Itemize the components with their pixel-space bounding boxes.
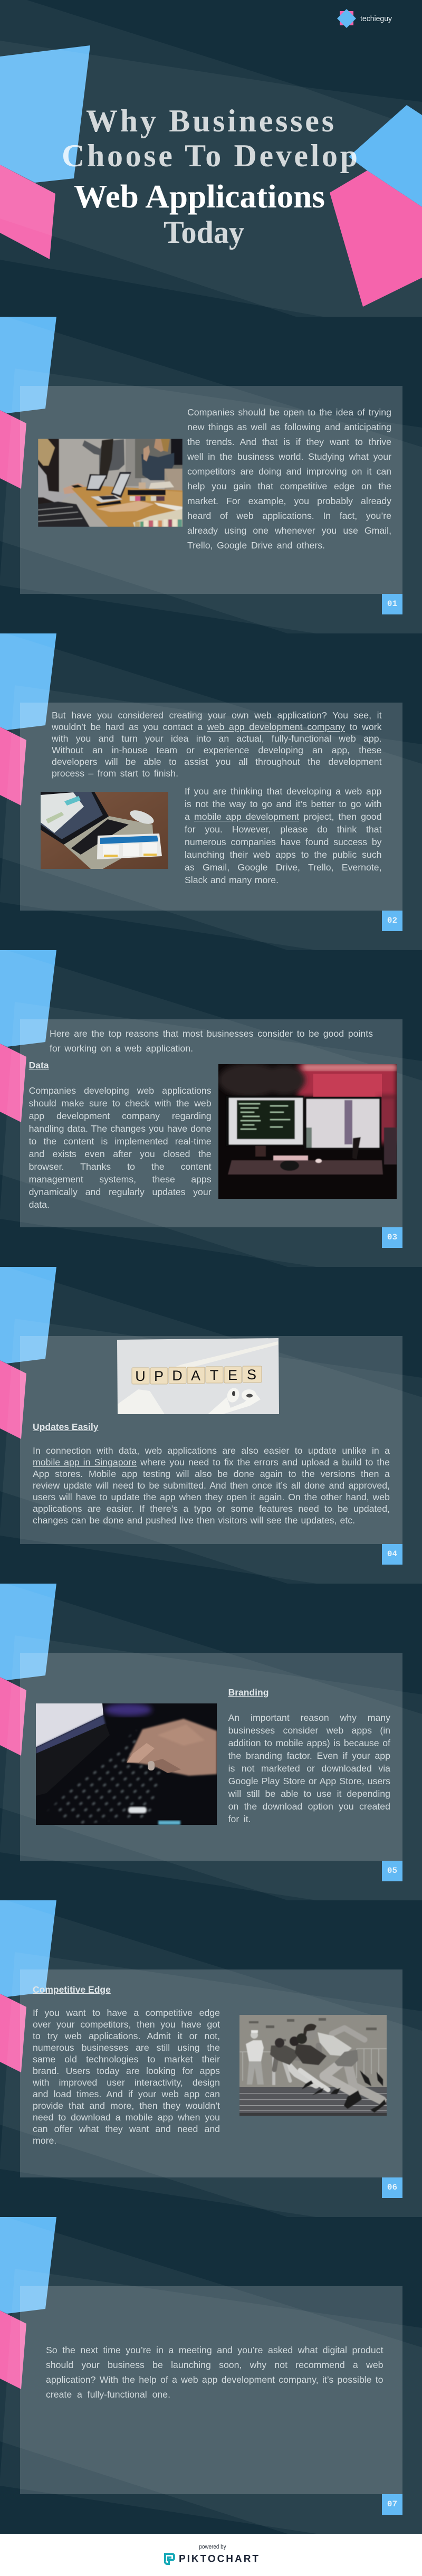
text: branding paragraph <box>228 1712 390 1824</box>
badge 03 <box>382 1227 402 1248</box>
letter tiles: U <box>135 1368 146 1384</box>
text: intro paragraph <box>187 407 391 551</box>
section 4 background <box>0 1267 422 1584</box>
icon: Piktochart logo <box>165 2554 174 2564</box>
text: branding paragraph: An important reason why many <box>228 1712 390 1723</box>
background: hero section <box>0 0 422 317</box>
photo: sprinters leaving the blocks <box>239 2015 387 2116</box>
text: own web application: process – from start to finish. <box>52 768 178 779</box>
text: data paragraph: browser. Thanks to the content <box>29 1161 212 1172</box>
photo: dual monitors on a desk <box>218 1064 397 1199</box>
hero left blue shape <box>0 45 90 183</box>
text: mobile app comparison: Slack and many more. <box>185 875 279 885</box>
text: updates paragraph: review update will need to be submitted. And then once it’s all done and approved, <box>33 1480 390 1491</box>
text: data paragraph <box>28 1085 212 1210</box>
text: intro paragraph: Trello, Google Drive and others. <box>187 540 325 551</box>
text: top reasons intro <box>50 1028 373 1054</box>
text: data paragraph: dynamically and regularly updates your <box>29 1187 212 1197</box>
hero right blue shape <box>349 105 422 207</box>
logo: techieguy: techieguy <box>360 14 392 23</box>
title: Why Businesses <box>86 103 334 138</box>
text: updates paragraph: users will have to update the app when they open it again. On the other hand, web <box>33 1492 390 1502</box>
panel 3 <box>20 1019 402 1227</box>
title: Choose To Develop <box>62 138 358 173</box>
text: mobile app comparison: launching their web apps to the public such <box>185 849 382 860</box>
text: conclusion: So the next time you’re in a meeting and you’re asked what digital product <box>46 2345 383 2355</box>
text: branding paragraph: is not marketed or downloaded via <box>228 1763 390 1774</box>
letter tiles: E <box>228 1367 237 1383</box>
badge 03: 03 <box>387 1233 397 1242</box>
text: competitive edge paragraph: over your competitors, then you have got <box>33 2019 220 2030</box>
text: branding paragraph: for it. <box>228 1814 251 1824</box>
badge 05: 05 <box>387 1866 397 1876</box>
text: competitive edge paragraph: brand. Users today are looking for apps <box>33 2066 220 2076</box>
panel 7 <box>20 2286 402 2494</box>
photo: UPDATES letter tiles <box>117 1338 279 1414</box>
text: competitive edge paragraph: numerous businesses are still using the <box>33 2042 220 2053</box>
text: conclusion: should your business be launching soon, why not recommend a web <box>46 2360 383 2370</box>
photo: hand typing on a laptop keyboard <box>36 1703 217 1825</box>
text: own web application: with you and turn your idea into an actual, fully-functional web app. <box>52 733 382 744</box>
text: branding paragraph: businesses consider web apps (in <box>228 1725 390 1736</box>
text: intro paragraph: help you gain that competitive edge on the <box>187 481 391 491</box>
heading: Branding: Branding <box>228 1687 268 1698</box>
badge 02: 02 <box>387 916 397 925</box>
section 5 background <box>0 1584 422 1900</box>
photo: team meeting around a table <box>38 439 183 527</box>
letter tiles: D <box>172 1368 183 1384</box>
text: intro paragraph: well in the business world. Studying what your <box>187 451 391 462</box>
photo: laptop and tablet on wood table <box>41 792 168 869</box>
text: data paragraph: handling data. The changes you have done <box>29 1123 212 1134</box>
text: mobile app comparison: numerous companies have found success by <box>185 837 382 847</box>
letter tiles: P <box>154 1368 164 1384</box>
text: updates paragraph: changes can be done and pushed live then visitors will see the updates, etc. <box>33 1515 355 1526</box>
text: mobile app comparison: as Gmail, Google Drive, Trello, Evernote, <box>185 862 382 873</box>
text: own web application: Without an in-house team or experience developing an app, these <box>52 745 382 755</box>
text: intro paragraph: heard of web applications. In fact, you’re <box>187 510 391 521</box>
text: mobile app comparison: for you. However, please do think that <box>185 824 382 835</box>
text: intro paragraph: the trends. And that is if they want to thrive <box>187 437 391 447</box>
text: competitive edge paragraph: can offer what they want and need and <box>33 2124 220 2134</box>
text: data paragraph: to the content is implemented real-time <box>29 1136 212 1147</box>
badge 04 <box>382 1544 402 1565</box>
text: top reasons intro: for working on a web application. <box>50 1043 193 1054</box>
text: competitive edge paragraph: provide that and more, then they wouldn’t <box>33 2100 220 2111</box>
badge 07: 07 <box>387 2499 397 2509</box>
text: updates paragraph: App stores. Mobile app testing will also be done again to the versions then a <box>33 1469 390 1479</box>
text: competitive edge paragraph: with improved user interactivity, design <box>33 2077 220 2088</box>
footer: powered by Piktochart: powered by <box>199 2544 226 2550</box>
text: updates paragraph <box>33 1445 390 1526</box>
spectator <box>246 2030 264 2085</box>
text: updates paragraph: In connection with data, web applications are also easier to update unlike in a <box>33 1445 390 1456</box>
text: competitive edge paragraph: same old technologies to market their <box>33 2054 220 2064</box>
text: competitive edge paragraph: to try web applications. Admit it or not, <box>33 2031 220 2041</box>
letter tiles <box>132 1366 262 1384</box>
panel 6 <box>20 1969 402 2177</box>
text: top reasons intro: Here are the top reasons that most businesses consider to be good points <box>50 1028 373 1039</box>
logo: techieguy <box>337 9 392 28</box>
letter tiles: S <box>247 1367 256 1382</box>
text: conclusion: application? With the help of a web app development company, it’s possible to <box>46 2374 383 2385</box>
text: conclusion <box>46 2345 383 2400</box>
text: mobile app comparison <box>185 786 382 885</box>
section 7 background <box>0 2217 422 2534</box>
text: updates paragraph: applications are easier. If there’s a typo or some features need to be updated, <box>33 1503 390 1514</box>
panel 1 <box>20 386 402 594</box>
text: data paragraph: app development company regarding <box>29 1111 212 1121</box>
panel 4 <box>20 1336 402 1544</box>
text: conclusion: create a fully-functional one. <box>46 2389 170 2400</box>
badge 06 <box>382 2177 402 2198</box>
title <box>62 103 358 250</box>
hero left pink shape <box>0 165 55 259</box>
section 6 background <box>0 1900 422 2217</box>
footer: powered by Piktochart <box>164 2544 258 2565</box>
text: intro paragraph: new things as well as following and anticipating <box>187 422 391 432</box>
badge 06: 06 <box>387 2183 397 2192</box>
text: mobile app comparison: is not the way to go and it’s better to go with <box>185 799 382 809</box>
badge 07 <box>382 2494 402 2515</box>
text: own web application: developers will be able to assist you all throughout the development <box>52 756 382 767</box>
badge 05 <box>382 1861 402 1881</box>
text: intro paragraph: Companies should be open to the idea of trying <box>187 407 391 418</box>
text: branding paragraph: addition to mobile apps) is because of <box>228 1738 390 1748</box>
badge 04: 04 <box>387 1549 397 1559</box>
letter tiles: T <box>210 1367 218 1383</box>
panel 5 <box>20 1653 402 1861</box>
badge 02 <box>382 911 402 931</box>
title: Web Applications <box>74 179 325 215</box>
text: mobile app comparison: a mobile app development project, then good <box>185 811 381 822</box>
footer: powered by Piktochart: PIKTOCHART <box>179 2554 258 2564</box>
text: data paragraph: Companies developing web applications <box>29 1085 212 1096</box>
text: competitive edge paragraph: If you want to have a competitive edge <box>33 2007 220 2018</box>
text: own web application <box>52 710 382 779</box>
badge 01 <box>382 594 402 614</box>
runners <box>274 2028 382 2100</box>
text: data paragraph: data. <box>29 1199 50 1210</box>
text: own web application: wouldn’t be hard as you contact a web app development company to work <box>52 722 382 732</box>
text: intro paragraph: already using one whenever you use Gmail, <box>187 525 391 536</box>
text: data paragraph: management systems, these apps <box>29 1174 212 1185</box>
text: competitive edge paragraph: and load times. And if your web app can <box>33 2089 220 2099</box>
text: branding paragraph: the branding factor. Even if your app <box>228 1750 390 1761</box>
text: branding paragraph: Google Play Store or App Store, users <box>228 1776 390 1786</box>
hero right pink shape <box>330 171 422 307</box>
heading: Updates Easily: Updates Easily <box>33 1422 98 1432</box>
letter tiles: A <box>191 1368 200 1384</box>
title: Today <box>164 215 244 250</box>
text: competitive edge paragraph: more. <box>33 2135 56 2146</box>
text: intro paragraph: market. For example, you probably already <box>187 496 391 506</box>
text: intro paragraph: competitors are doing and improving on it can <box>187 466 391 477</box>
text: branding paragraph: will still be able to use it depending <box>228 1788 390 1799</box>
section 1 background <box>0 317 422 633</box>
text: updates paragraph: mobile app in Singapore where you need to fix the errors and upload a build to the <box>33 1457 390 1467</box>
heading: Data: Data <box>29 1060 49 1071</box>
text: competitive edge paragraph: need to download a mobile app when you <box>33 2112 220 2123</box>
text: mobile app comparison: If you are thinking that developing a web app <box>185 786 382 797</box>
text: data paragraph: should make sure to check with the web <box>29 1098 212 1109</box>
badge 01: 01 <box>387 599 397 609</box>
section 3 background <box>0 950 422 1267</box>
text: data paragraph: and exists even after you closed the <box>29 1149 212 1159</box>
panel 2 <box>20 703 402 911</box>
text: branding paragraph: on the download option you created <box>228 1801 390 1812</box>
text: competitive edge paragraph <box>33 2007 220 2146</box>
section 2 background <box>0 633 422 950</box>
text: own web application: But have you considered creating your own web application? You see, it <box>52 710 382 721</box>
heading: Competitive Edge: Competitive Edge <box>33 1984 111 1995</box>
